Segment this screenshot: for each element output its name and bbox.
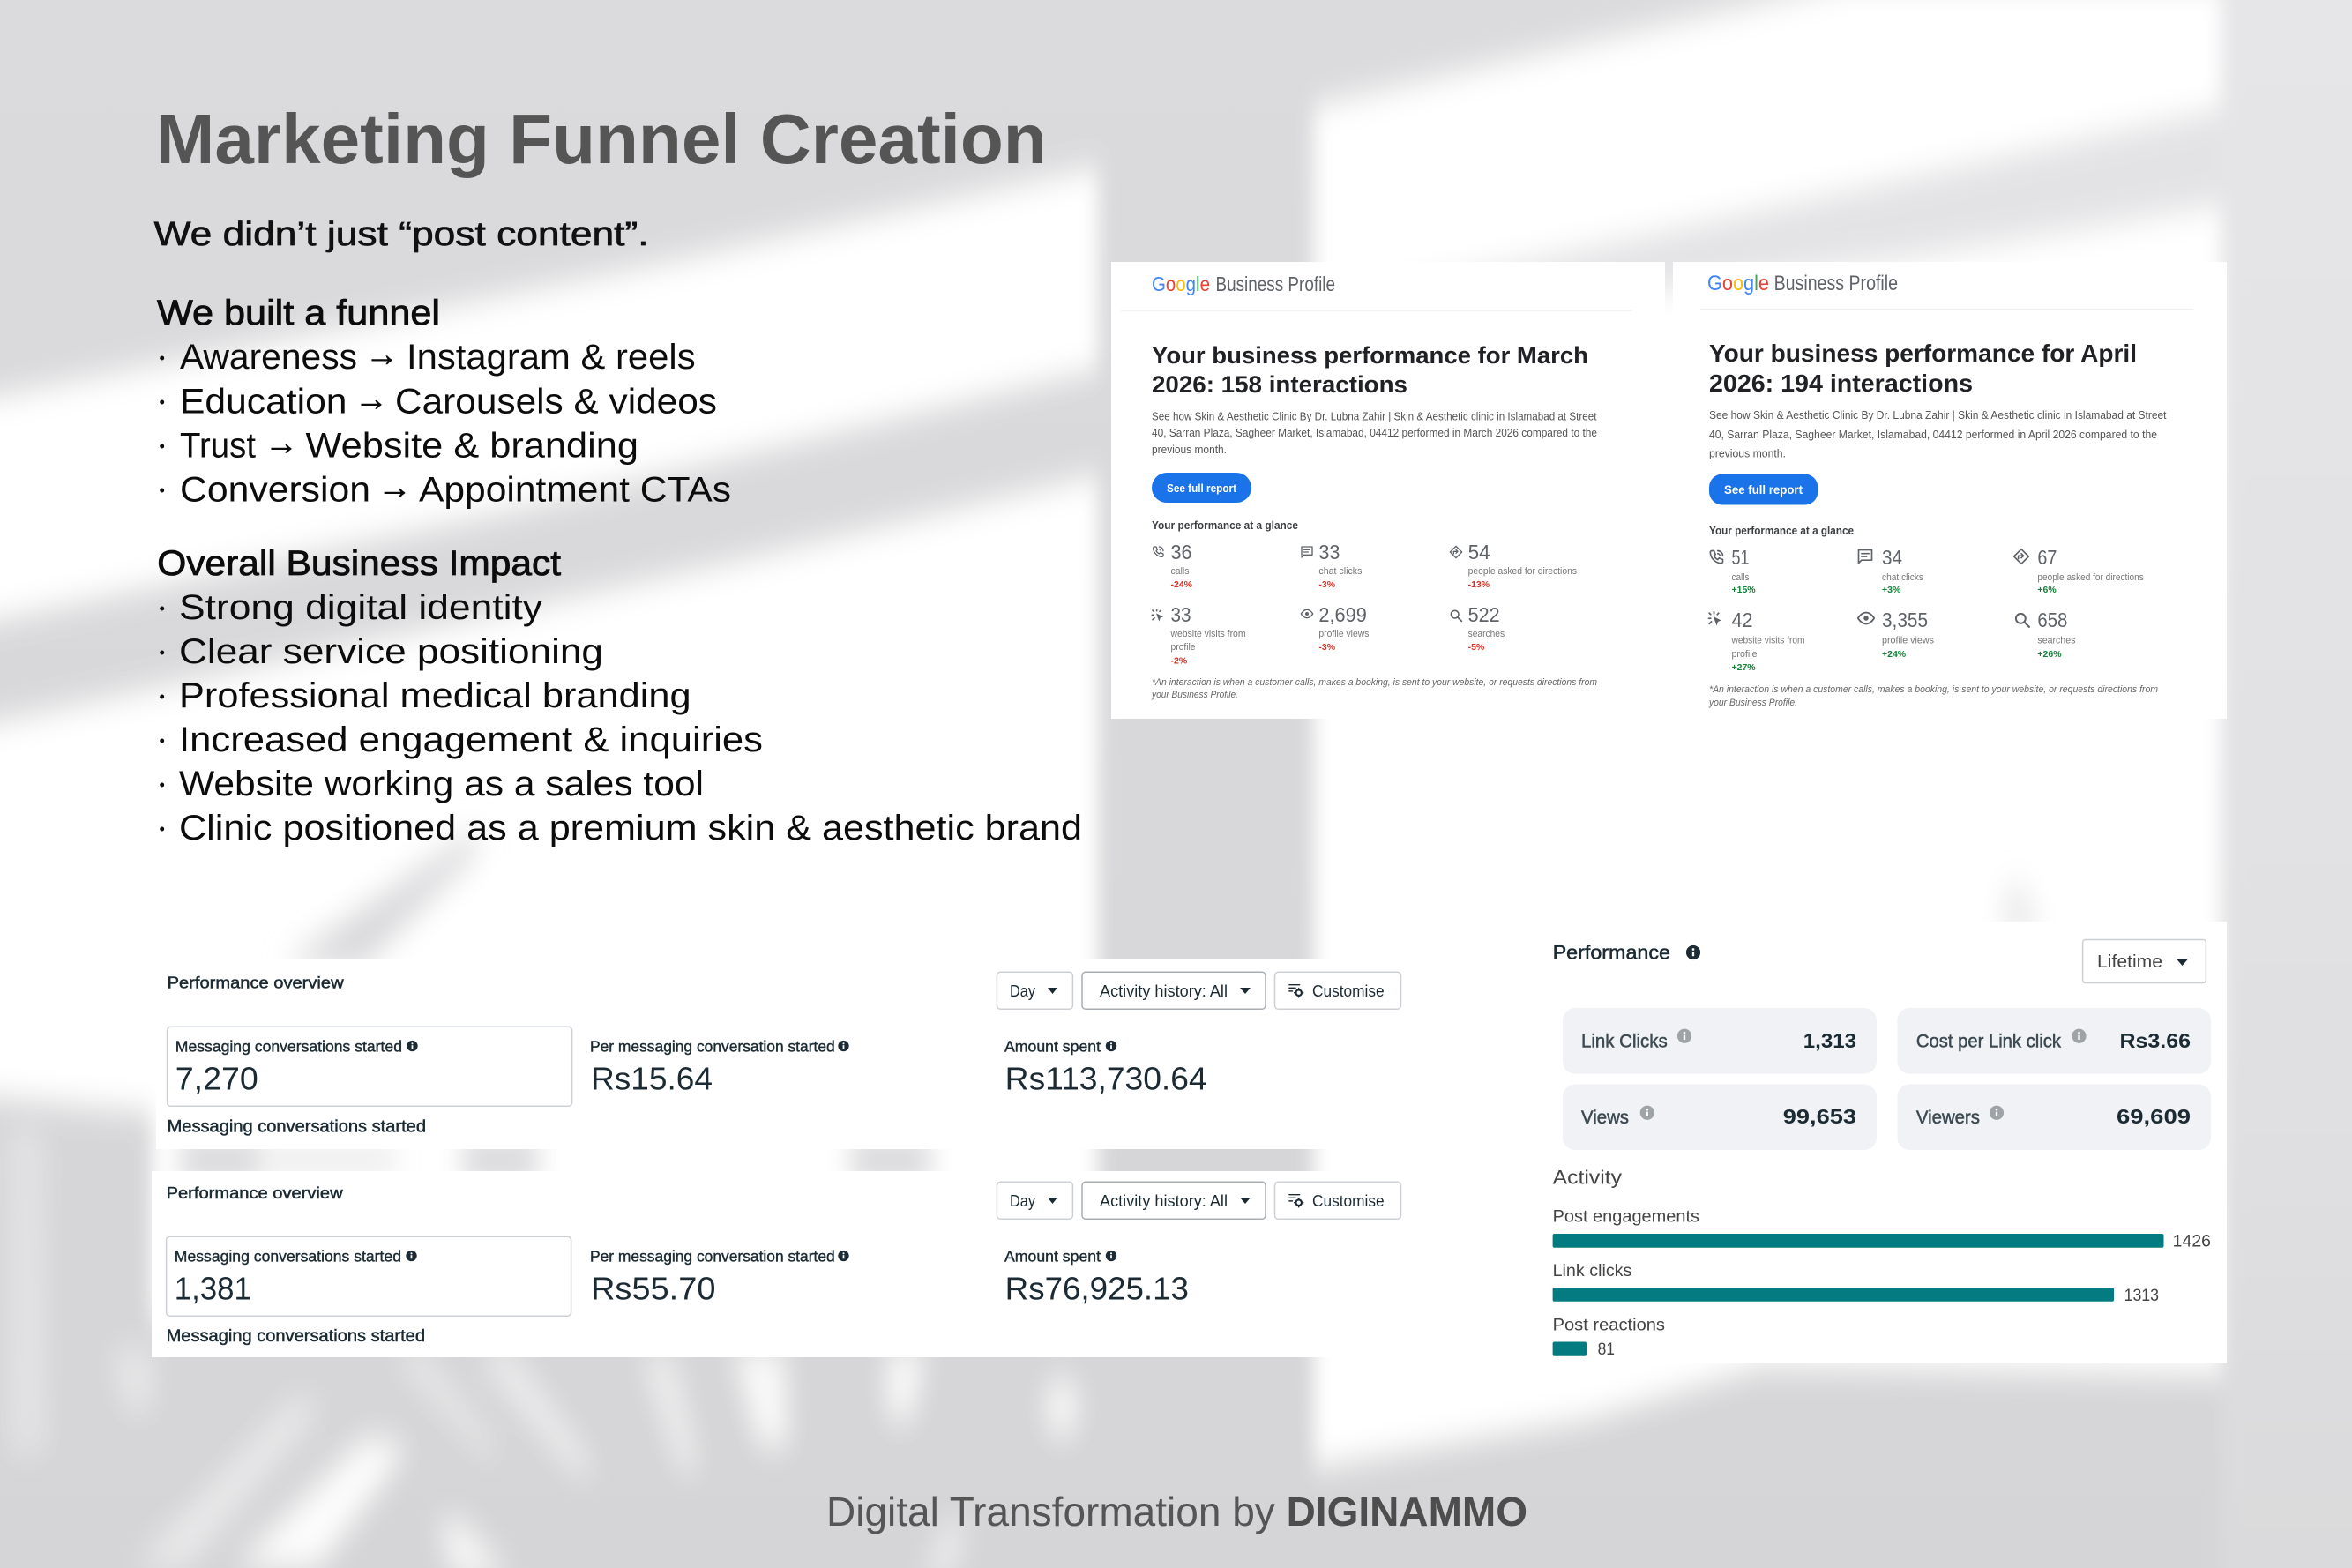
google business profile logo: Business Profile <box>1774 272 1898 295</box>
footnote: *An interaction is when a customer calls, makes a booking, is sent to your website, or requests directions from <box>1152 677 1597 688</box>
metrics grid: searches <box>1468 629 1505 639</box>
metrics grid: +6% <box>2037 585 2057 595</box>
funnel list: Instagram & reels <box>407 338 696 377</box>
funnel list: Carousels & videos <box>395 382 717 421</box>
description <box>1709 409 2167 460</box>
footer credit: Digital Transformation by DIGINAMMO <box>826 1489 1527 1534</box>
controls: Customise <box>1312 982 1385 1000</box>
impact list <box>160 588 1082 847</box>
controls: Day <box>1010 1192 1035 1210</box>
google business profile logo: Business Profile <box>1215 273 1335 295</box>
heading: Performance overview <box>168 974 344 992</box>
controls <box>997 1182 1400 1219</box>
metrics grid: 67 <box>2037 546 2057 569</box>
metrics grid: 2,699 <box>1318 603 1367 626</box>
bar chart: activity: Post engagements <box>1553 1208 1699 1227</box>
metric: messaging conversations: 1,381 <box>175 1270 251 1306</box>
stat cards <box>1563 1008 2211 1150</box>
heading: 2026: 158 interactions <box>1152 371 1407 398</box>
controls: Activity history: All <box>1100 1192 1228 1210</box>
funnel list: → <box>265 423 298 462</box>
funnel list: Trust <box>180 426 256 465</box>
bar chart: activity: Post reactions <box>1553 1316 1665 1334</box>
card: viewers: Viewers <box>1916 1108 1980 1128</box>
google business profile logo: Google <box>1152 273 1210 295</box>
button: See full report <box>1724 482 1803 497</box>
footnote: *An interaction is when a customer calls, makes a booking, is sent to your website, or requests directions from <box>1709 684 2158 695</box>
glance heading: Your performance at a glance <box>1152 519 1298 532</box>
metrics grid: chat clicks <box>1882 572 1923 583</box>
metrics grid: -13% <box>1468 579 1490 590</box>
metrics grid: profile views <box>1882 635 1934 646</box>
metrics grid: 51 <box>1732 546 1750 569</box>
text block: we built a funnel <box>157 294 731 509</box>
footnote: your Business Profile. <box>1151 690 1238 700</box>
heading: overall business impact: Overall Business Impact <box>157 544 561 583</box>
heading: we built a funnel: We built a funnel <box>157 294 440 332</box>
description: 40, Sarran Plaza, Sagheer Market, Islamabad, 04412 performed in March 2026 compared to the <box>1152 427 1597 439</box>
metrics grid: calls <box>1732 572 1750 583</box>
card: cost per link click <box>1897 1008 2211 1074</box>
heading: Your business performance for April <box>1709 340 2137 367</box>
chart caption: Messaging conversations started <box>168 1117 426 1136</box>
subtitle: We didn’t just “post content”. <box>154 216 649 253</box>
button <box>1709 474 1818 504</box>
card: link clicks: Link Clicks <box>1581 1032 1668 1051</box>
footnote: your Business Profile. <box>1708 698 1797 708</box>
metrics grid: website visits from <box>1731 635 1804 646</box>
metrics grid: -24% <box>1171 579 1193 590</box>
button: See full report <box>1167 482 1237 495</box>
funnel list: Appointment CTAs <box>419 470 731 509</box>
metric: per conversation <box>590 1248 849 1306</box>
impact list: Clinic positioned as a premium skin & aesthetic brand <box>179 809 1082 847</box>
metrics grid: profile <box>1171 642 1196 653</box>
footnote <box>1151 677 1597 700</box>
panel: google business profile april <box>1673 262 2227 719</box>
metrics grid: 36 <box>1171 541 1192 564</box>
metric: per conversation: Rs55.70 <box>591 1270 716 1306</box>
metric: messaging conversations: 7,270 <box>175 1061 258 1097</box>
metrics grid: website visits from <box>1170 629 1245 639</box>
description: previous month. <box>1709 448 1786 460</box>
metric: per conversation: Per messaging conversation started <box>590 1248 835 1266</box>
card: viewers: 69,609 <box>2117 1105 2191 1128</box>
metric: per conversation: Per messaging conversation started <box>590 1038 835 1056</box>
lifetime dropdown <box>2083 940 2206 982</box>
description <box>1152 411 1597 456</box>
metrics grid: 33 <box>1318 541 1340 564</box>
card: cost per link click: Cost per Link click <box>1916 1032 2061 1051</box>
panel: ads performance overview one <box>156 959 1400 1149</box>
funnel list: → <box>355 379 388 418</box>
metric: amount spent <box>1004 1038 1207 1097</box>
impact list: Strong digital identity <box>179 588 542 627</box>
metrics grid: -5% <box>1468 642 1485 653</box>
metric: per conversation <box>590 1038 849 1097</box>
metrics grid: 522 <box>1468 603 1500 626</box>
funnel list: Conversion <box>180 470 370 509</box>
metrics grid: -2% <box>1171 656 1188 667</box>
metrics grid: -3% <box>1318 579 1336 590</box>
metrics grid: +3% <box>1882 585 1901 595</box>
bar chart: activity: 1426 <box>2173 1233 2211 1251</box>
heading: 2026: 194 interactions <box>1709 370 1973 397</box>
google business profile logo: Google <box>1707 272 1769 295</box>
metrics grid: +27% <box>1732 662 1756 673</box>
metrics grid: -3% <box>1318 642 1336 653</box>
activity heading: Activity <box>1553 1167 1622 1189</box>
funnel list: Education <box>180 382 347 421</box>
card: views <box>1563 1085 1877 1150</box>
card: link clicks <box>1563 1008 1877 1074</box>
card: views: 99,653 <box>1783 1105 1856 1128</box>
panel: post performance <box>1543 922 2227 1363</box>
metrics grid: 658 <box>2037 609 2067 631</box>
funnel list <box>160 335 731 509</box>
metric: amount spent: Rs113,730.64 <box>1005 1061 1207 1097</box>
funnel list: → <box>377 467 412 506</box>
metrics grid: +24% <box>1882 649 1907 660</box>
panel: google business profile march <box>1111 262 1665 719</box>
impact list: Clear service positioning <box>179 632 603 671</box>
metric: amount spent: Rs76,925.13 <box>1005 1270 1189 1306</box>
metrics grid: profile <box>1732 649 1757 660</box>
description: See how Skin & Aesthetic Clinic By Dr. Lubna Zahir | Skin & Aesthetic clinic in Islamabad at Street <box>1709 409 2167 422</box>
card: viewers <box>1897 1085 2211 1150</box>
metric: amount spent: Amount spent <box>1004 1248 1101 1266</box>
metrics grid: +15% <box>1732 585 1756 595</box>
funnel list: → <box>365 335 399 374</box>
description: See how Skin & Aesthetic Clinic By Dr. Lubna Zahir | Skin & Aesthetic clinic in Islamabad at Street <box>1152 411 1597 423</box>
controls: Day <box>1010 982 1035 1000</box>
glance heading: Your performance at a glance <box>1709 525 1854 537</box>
controls: Activity history: All <box>1100 982 1228 1000</box>
metrics grid: +26% <box>2037 649 2062 660</box>
description: previous month. <box>1152 444 1227 456</box>
metrics grid: people asked for directions <box>1468 566 1577 577</box>
funnel list: Awareness <box>180 338 357 377</box>
heading: Performance <box>1553 942 1670 963</box>
heading <box>1709 340 2137 397</box>
impact list: Website working as a sales tool <box>179 765 704 803</box>
metrics grid: people asked for directions <box>2037 572 2144 583</box>
metrics grid: 54 <box>1468 541 1490 564</box>
button <box>1152 473 1251 503</box>
panel: ads performance overview two <box>152 1171 1400 1357</box>
metrics grid: profile views <box>1318 629 1370 639</box>
impact list: Increased engagement & inquiries <box>179 721 763 759</box>
text block: overall business impact <box>157 544 1082 847</box>
metrics grid: chat clicks <box>1318 566 1363 577</box>
heading: Performance overview <box>167 1183 343 1202</box>
metrics grid: calls <box>1171 566 1190 577</box>
controls: Customise <box>1312 1192 1385 1210</box>
metric: amount spent <box>1004 1248 1189 1306</box>
metrics grid: 3,355 <box>1882 609 1928 631</box>
bar chart: activity: 81 <box>1598 1340 1615 1359</box>
metrics grid: 34 <box>1882 546 1902 569</box>
lifetime dropdown: Lifetime <box>2097 952 2162 972</box>
metrics grid <box>1152 541 1577 667</box>
controls <box>997 972 1400 1009</box>
title: Marketing Funnel Creation <box>156 100 1047 178</box>
metric: messaging conversations <box>168 1027 572 1106</box>
metric: messaging conversations <box>167 1236 571 1316</box>
funnel list: Website & branding <box>305 426 638 465</box>
card: views: Views <box>1581 1108 1629 1128</box>
google business profile logo <box>1152 273 1335 295</box>
bar chart: activity: Link clicks <box>1553 1262 1631 1281</box>
metric: per conversation: Rs15.64 <box>591 1061 713 1097</box>
metrics grid: 42 <box>1732 609 1753 631</box>
bar chart: activity: 1313 <box>2124 1287 2159 1305</box>
metrics grid: searches <box>2037 635 2076 646</box>
metric: messaging conversations: Messaging conversations started <box>175 1038 402 1056</box>
card: link clicks: 1,313 <box>1803 1029 1856 1052</box>
chart caption: Messaging conversations started <box>167 1327 425 1346</box>
impact list: Professional medical branding <box>179 676 691 715</box>
metrics grid <box>1709 546 2144 673</box>
heading <box>1152 342 1588 398</box>
metric: amount spent: Amount spent <box>1004 1038 1101 1056</box>
google business profile logo <box>1707 272 1898 295</box>
metrics grid: 33 <box>1171 603 1191 626</box>
card: cost per link click: Rs3.66 <box>2120 1029 2191 1052</box>
metric: messaging conversations: Messaging conversations started <box>175 1248 401 1266</box>
footnote <box>1708 684 2158 708</box>
bar chart: activity <box>1553 1208 2211 1359</box>
heading: Your business performance for March <box>1152 342 1588 369</box>
description: 40, Sarran Plaza, Sagheer Market, Islamabad, 04412 performed in April 2026 compared to the <box>1709 429 2157 441</box>
